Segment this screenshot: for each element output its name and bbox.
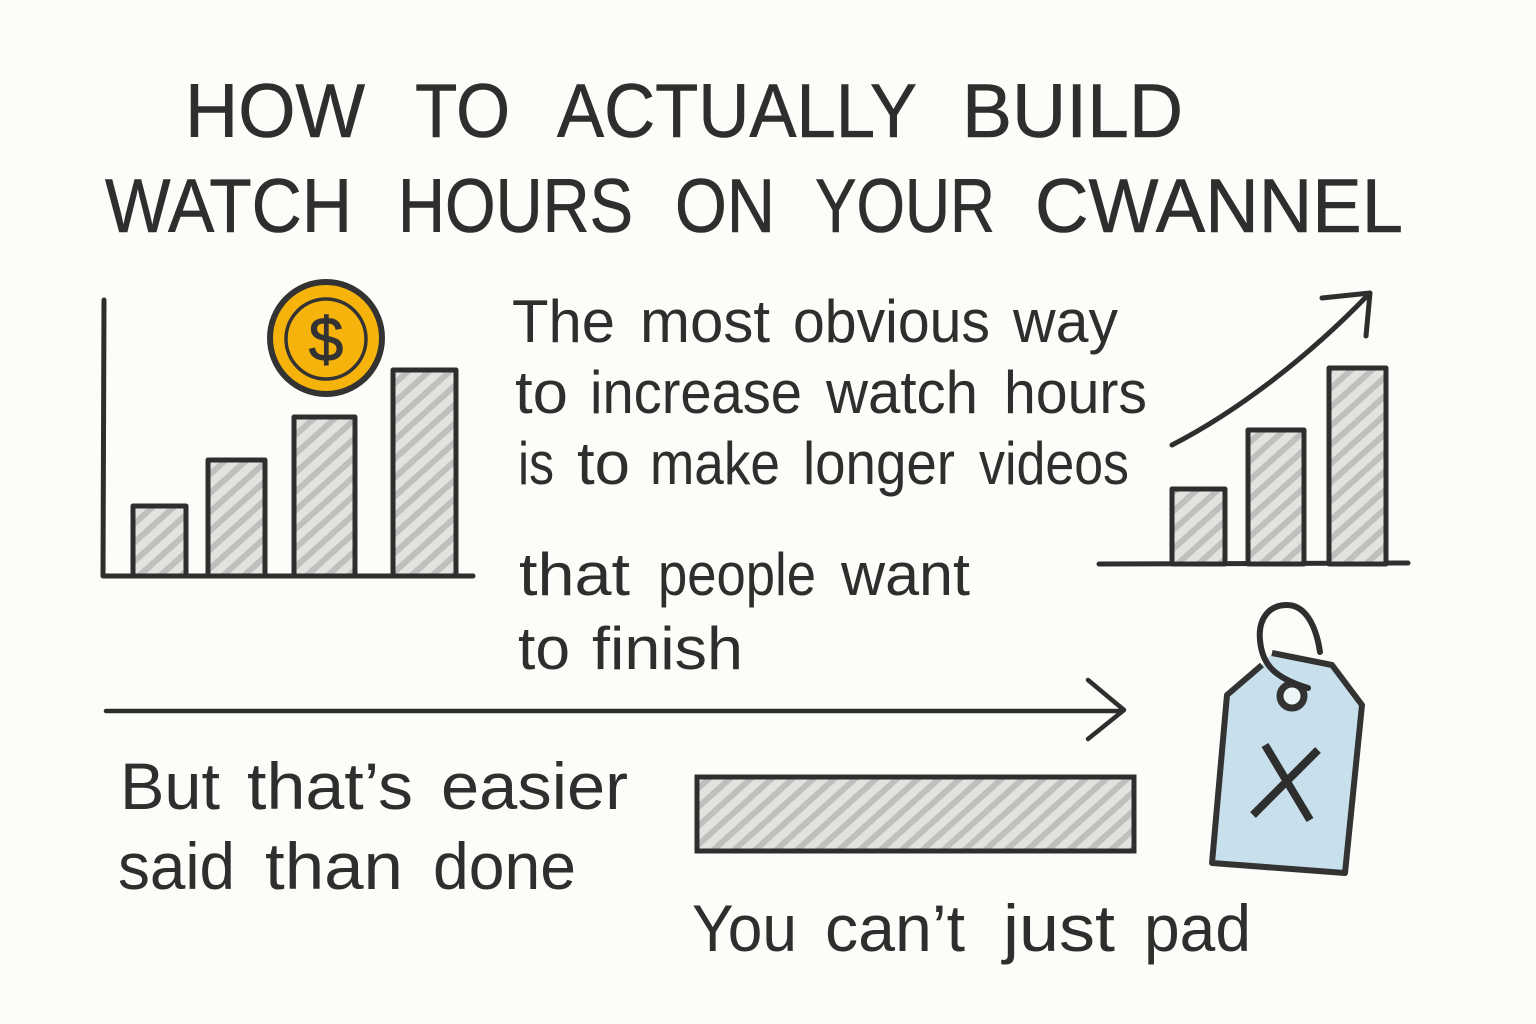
icon: dollar coin: $ [309, 306, 343, 375]
intro text: to [515, 359, 568, 426]
chart bars [133, 370, 456, 576]
caption [692, 891, 1251, 965]
intro text: way [1012, 288, 1118, 355]
intro text: watch [825, 359, 978, 426]
caveat text: that’s [247, 749, 413, 823]
title: WATCH [105, 164, 352, 249]
caveat text: said [118, 829, 235, 903]
second text block: want [840, 541, 970, 608]
bar chart with coin [103, 282, 473, 576]
title: ACTUALLY [557, 69, 917, 154]
caption: can’t [825, 891, 965, 965]
intro text: most [640, 288, 770, 355]
second text block: to [518, 615, 570, 682]
title [105, 69, 1403, 249]
caption: pad [1144, 891, 1251, 965]
intro text: increase [590, 359, 802, 426]
growth bars [1172, 368, 1386, 564]
intro text: make [650, 430, 780, 497]
caveat text [118, 749, 628, 903]
growth chart with arrow [1099, 293, 1408, 564]
baseline [1099, 563, 1408, 564]
title: ON [675, 164, 775, 249]
chart axes [103, 300, 473, 576]
caveat text: than [265, 829, 403, 903]
intro text: obvious [793, 288, 990, 355]
second text block: that [519, 541, 630, 608]
title: HOURS [398, 164, 633, 249]
intro text: hours [1004, 359, 1147, 426]
caption: You [692, 891, 797, 965]
caveat text: done [433, 829, 576, 903]
arrow: upward trend [1172, 293, 1370, 445]
second text block [518, 541, 970, 682]
title: BUILD [962, 69, 1183, 154]
caveat text: But [120, 749, 220, 823]
intro text [512, 288, 1147, 497]
caption: just [1001, 891, 1115, 965]
icon: dollar coin [270, 282, 382, 394]
icon: price tag with X [1212, 605, 1362, 873]
intro text: videos [979, 430, 1129, 497]
caveat text: easier [441, 749, 628, 823]
arrow: long horizontal [106, 680, 1124, 739]
second text block: finish [592, 615, 743, 682]
title: HOW [185, 69, 365, 154]
intro text: longer [803, 430, 955, 497]
second text block: people [658, 541, 816, 608]
intro text: The [512, 288, 615, 355]
title: CWANNEL [1035, 164, 1403, 249]
title: YOUR [815, 164, 995, 249]
title: TO [415, 69, 510, 154]
intro text: to [577, 430, 630, 497]
intro text: is [518, 430, 554, 497]
padded bar [697, 777, 1134, 851]
